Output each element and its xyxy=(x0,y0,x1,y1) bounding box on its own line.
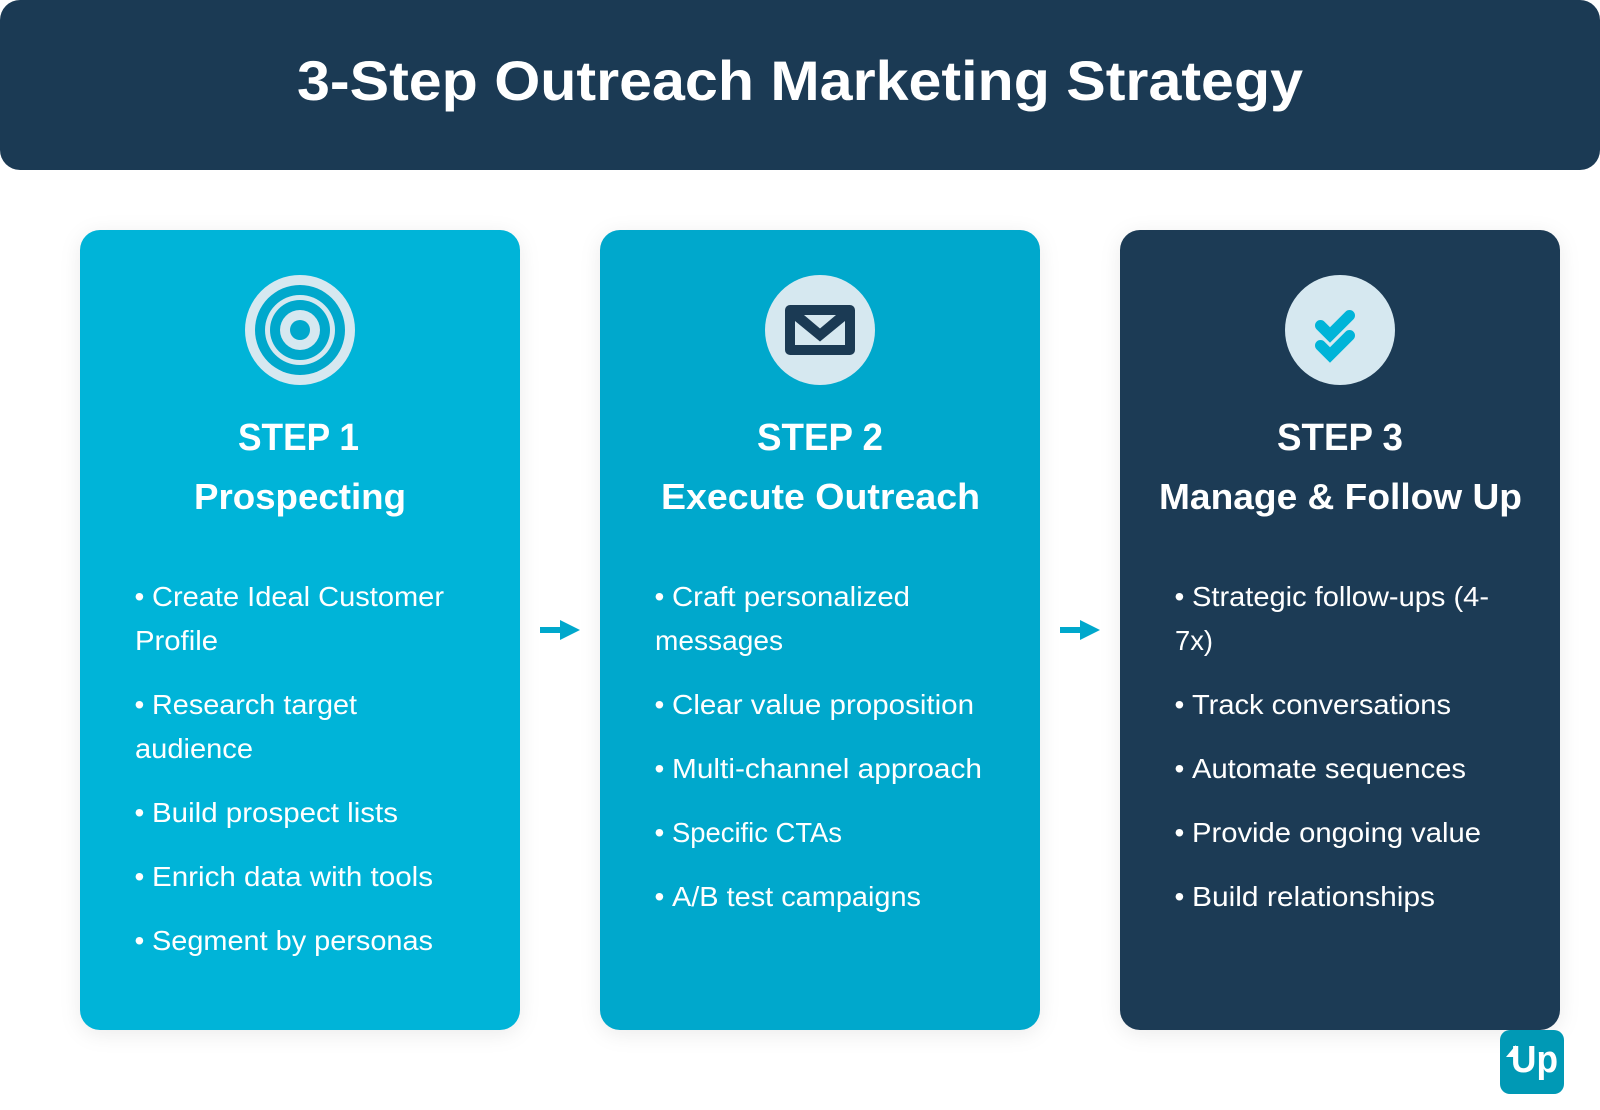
step 1 bullet list: • xyxy=(134,581,144,612)
step 3 bullet list: Track conversations xyxy=(1192,689,1451,720)
step 1 bullet list: Research target xyxy=(152,689,357,720)
title: 3-Step Outreach Marketing Strategy xyxy=(297,49,1303,112)
step 2 bullet list: Multi-channel approach xyxy=(672,753,982,784)
panel: step 1 prospecting xyxy=(80,230,520,1030)
step 1 label: STEP 1 xyxy=(238,417,359,459)
arrow: step 1 to step 2 xyxy=(540,620,580,640)
step 3 bullet list: • xyxy=(1174,581,1184,612)
step 1 bullet list: • xyxy=(134,925,144,956)
step 3 label: STEP 3 xyxy=(1277,417,1403,459)
step 2 bullet list: Craft personalized xyxy=(672,581,910,612)
step 1 bullet list: Segment by personas xyxy=(152,925,433,956)
step 3 bullet list: Build relationships xyxy=(1192,881,1435,912)
step 2 bullet list: Clear value proposition xyxy=(672,689,974,720)
icon: envelope xyxy=(765,275,875,385)
step 2 heading: Execute Outreach xyxy=(661,476,980,517)
step 1 bullet list: Build prospect lists xyxy=(152,797,398,828)
step 1 bullet list: • xyxy=(134,689,144,720)
step 3 bullet list: • xyxy=(1174,689,1184,720)
logo: Up badge: Up xyxy=(1511,1039,1558,1081)
step 2 bullet list: Specific CTAs xyxy=(672,817,842,848)
panel: step 2 execute outreach xyxy=(600,230,1040,1030)
step 1 heading: Prospecting xyxy=(194,476,406,517)
step 2 bullet list: • xyxy=(654,817,664,848)
step 3 bullet list: • xyxy=(1174,881,1184,912)
step 1 bullet list: • xyxy=(134,861,144,892)
step 3 bullet list: 7x) xyxy=(1175,625,1213,656)
step 2 bullet list: • xyxy=(654,881,664,912)
step 1 bullet list: Enrich data with tools xyxy=(152,861,433,892)
step 2 bullet list xyxy=(654,581,982,912)
step 3 bullet list: Automate sequences xyxy=(1192,753,1466,784)
step 1 bullet list: • xyxy=(134,797,144,828)
header banner xyxy=(0,0,1600,170)
step 2 bullet list: • xyxy=(654,689,664,720)
step 3 bullet list: Provide ongoing value xyxy=(1192,817,1481,848)
step 2 bullet list: messages xyxy=(655,625,783,656)
step 3 bullet list: • xyxy=(1174,817,1184,848)
step 2 bullet list: • xyxy=(654,581,664,612)
step 1 bullet list: Create Ideal Customer xyxy=(152,581,444,612)
icon: target xyxy=(245,275,355,385)
step 1 bullet list: Profile xyxy=(135,625,218,656)
arrow: step 2 to step 3 xyxy=(1060,620,1100,640)
step 1 bullet list: audience xyxy=(135,733,253,764)
step 3 bullet list: • xyxy=(1174,753,1184,784)
step 3 bullet list xyxy=(1174,581,1489,912)
panel: step 3 manage and follow up xyxy=(1120,230,1560,1030)
logo: Up badge xyxy=(1500,1030,1564,1094)
step 3 heading: Manage & Follow Up xyxy=(1159,476,1522,517)
icon: double check xyxy=(1285,275,1395,385)
step 2 label: STEP 2 xyxy=(757,417,883,459)
step 2 bullet list: A/B test campaigns xyxy=(672,881,921,912)
step 3 bullet list: Strategic follow-ups (4- xyxy=(1192,581,1489,612)
step 1 bullet list xyxy=(134,581,444,956)
step 2 bullet list: • xyxy=(654,753,664,784)
